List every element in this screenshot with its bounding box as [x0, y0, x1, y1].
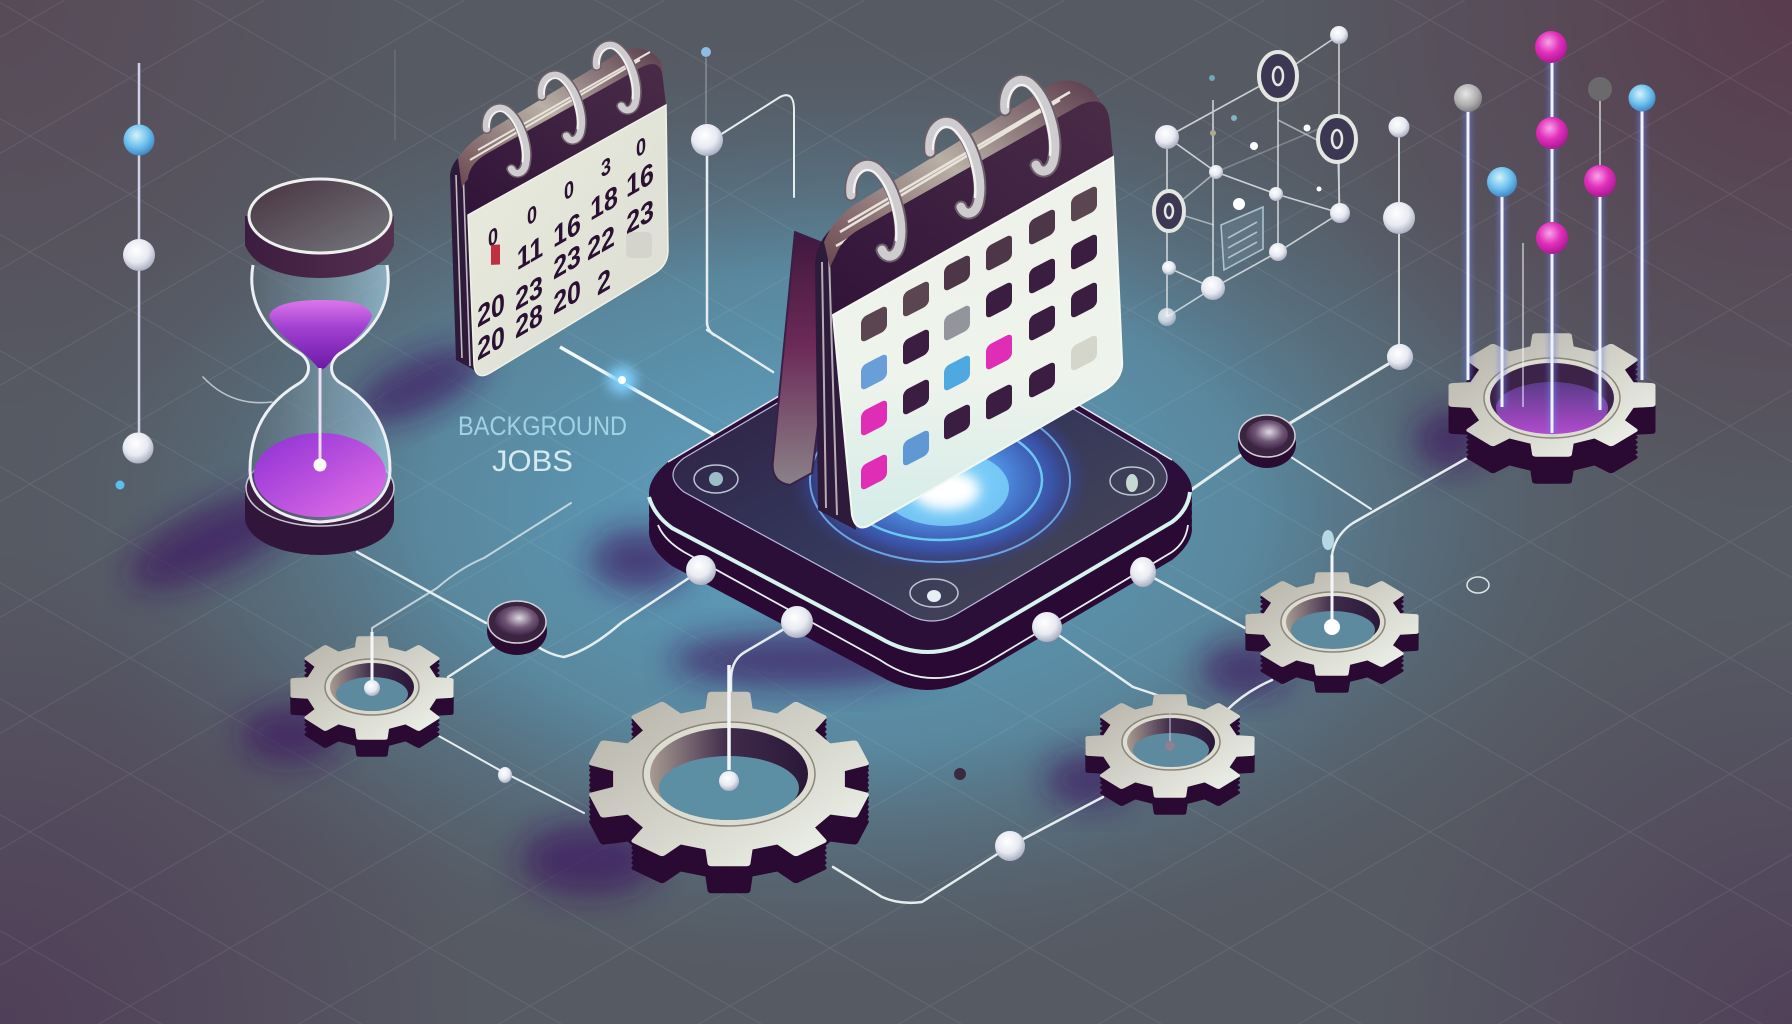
calendar numbers: 0 [636, 131, 646, 163]
calendar numbers: 16 [626, 155, 654, 205]
bright link from small calendar [560, 347, 714, 435]
calendar numbers: 11 [517, 229, 543, 278]
calendar numbers: 28 [515, 296, 543, 346]
hourglass [245, 179, 394, 555]
connector nodes [498, 344, 1489, 861]
calendar numbers: 20 [553, 272, 581, 322]
pins glow [1468, 60, 1642, 433]
glow disc [790, 388, 1090, 572]
document [1221, 207, 1263, 270]
sand [254, 300, 386, 517]
gear: large centre [593, 665, 865, 891]
small calendar [450, 45, 668, 376]
calendar numbers: 0 [488, 221, 498, 253]
calendar numbers: 16 [553, 205, 581, 255]
connector lines [203, 50, 1469, 903]
network diagram [1154, 26, 1356, 326]
soft drop shadows [115, 332, 1486, 896]
calendar numbers: 20 [477, 285, 505, 335]
left vertical timeline [116, 63, 155, 490]
ring nodes [1154, 52, 1356, 231]
pins [1468, 60, 1642, 433]
calendar numbers: 0 [527, 199, 537, 231]
calendar numbers: 18 [590, 178, 618, 228]
binder rings [851, 80, 1055, 256]
dark button right [1238, 415, 1296, 468]
label: background jobs: JOBS [492, 445, 573, 478]
central platform [649, 322, 1192, 690]
calendar numbers: 0 [564, 174, 574, 206]
pin balls [1454, 31, 1656, 254]
central calendar [773, 80, 1122, 530]
white nodes [1155, 26, 1350, 326]
calendar numbers: 20 [477, 318, 505, 368]
platform sockets [694, 465, 1154, 607]
calendar numbers: 2 [597, 261, 611, 303]
calendar numbers: 3 [601, 151, 611, 183]
right vertical connector [1383, 116, 1415, 370]
calendar numbers: 23 [515, 268, 543, 318]
label: background jobs [458, 411, 627, 478]
gear: right lower [1088, 696, 1252, 813]
label: background jobs: BACKGROUND [458, 411, 627, 441]
calendar numbers: 23 [626, 192, 654, 242]
dark button left [487, 601, 547, 655]
calendar numbers: 23 [553, 237, 581, 287]
top node above link [691, 47, 723, 156]
gear: right upper [1248, 555, 1416, 691]
calendar numbers: 22 [587, 218, 615, 268]
gear: left small [293, 632, 451, 755]
small binder rings [486, 45, 637, 173]
day cells [861, 185, 1097, 491]
calendar numbers [477, 131, 654, 368]
gear with pins: top right [1452, 31, 1656, 482]
